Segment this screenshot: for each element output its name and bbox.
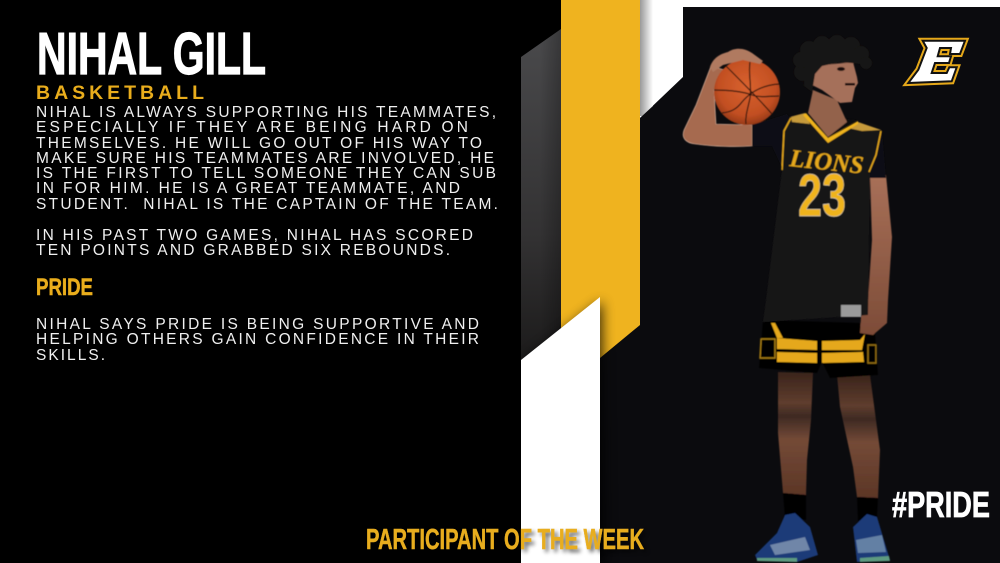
hand on ball: [710, 49, 763, 72]
gray angled band: [521, 29, 561, 370]
inner neckline: [810, 115, 857, 138]
shorts: [759, 320, 878, 378]
pride paragraph: [36, 316, 479, 364]
basketball: [714, 59, 780, 125]
player photo illustration: [683, 35, 892, 562]
left leg: [778, 372, 813, 495]
pride paragraph: NIHAL SAYS PRIDE IS BEING SUPPORTIVE AND: [36, 316, 479, 333]
jersey tag: [841, 305, 861, 317]
footer title: PARTICIPANT OF THE WEEK: [366, 524, 644, 556]
face: [808, 62, 858, 103]
raised arm: [683, 66, 752, 147]
right leg: [837, 375, 880, 498]
bio paragraph: MAKE SURE HIS TEAMMATES ARE INVOLVED, HE: [36, 150, 494, 167]
neck: [808, 90, 847, 137]
facial features: [837, 67, 855, 86]
bio paragraph: NIHAL IS ALWAYS SUPPORTING HIS TEAMMATES,: [36, 104, 496, 121]
jersey: [763, 113, 882, 322]
sport: BASKETBALL: [36, 82, 204, 104]
athlete name: NIHAL GILL: [37, 21, 266, 87]
recent stats paragraph: [36, 227, 473, 259]
pride paragraph: SKILLS.: [36, 347, 105, 364]
pride paragraph: HELPING OTHERS GAIN CONFIDENCE IN THEIR: [36, 331, 479, 348]
jersey number: 23: [798, 162, 846, 229]
team name: LIONS: [787, 145, 865, 180]
right arm: [860, 175, 892, 335]
socks: [783, 493, 878, 521]
recent stats paragraph: IN HIS PAST TWO GAMES, NIHAL HAS SCORED: [36, 227, 473, 244]
left sleeve: [752, 114, 790, 170]
bio paragraph: STUDENT. NIHAL IS THE CAPTAIN OF THE TEAM.: [36, 196, 498, 213]
right shoe: [853, 514, 890, 562]
pride heading: PRIDE: [36, 274, 93, 301]
recent stats paragraph: TEN POINTS AND GRABBED SIX REBOUNDS.: [36, 242, 450, 259]
left shoe: [755, 513, 818, 562]
school E logo: [908, 41, 965, 83]
bio paragraph: IS THE FIRST TO TELL SOMEONE THEY CAN SUB: [36, 165, 496, 182]
bio paragraph: ESPECIALLY IF THEY ARE BEING HARD ON: [36, 119, 468, 136]
collar: [803, 113, 858, 143]
bio paragraph: THEMSELVES. HE WILL GO OUT OF HIS WAY TO: [36, 135, 482, 152]
white angled band: [521, 297, 606, 563]
bio paragraph: IN FOR HIM. HE IS A GREAT TEAMMATE, AND: [36, 180, 460, 197]
left panel mask: [0, 0, 521, 563]
bio paragraph: [36, 104, 498, 213]
white top corner band: [640, 0, 1000, 125]
hair: [793, 35, 872, 92]
photo backdrop: [600, 0, 1000, 563]
footer title shadow: PARTICIPANT OF THE WEEK: [369, 527, 647, 559]
right sleeve: [868, 130, 886, 178]
gold angled band: [561, 0, 640, 358]
